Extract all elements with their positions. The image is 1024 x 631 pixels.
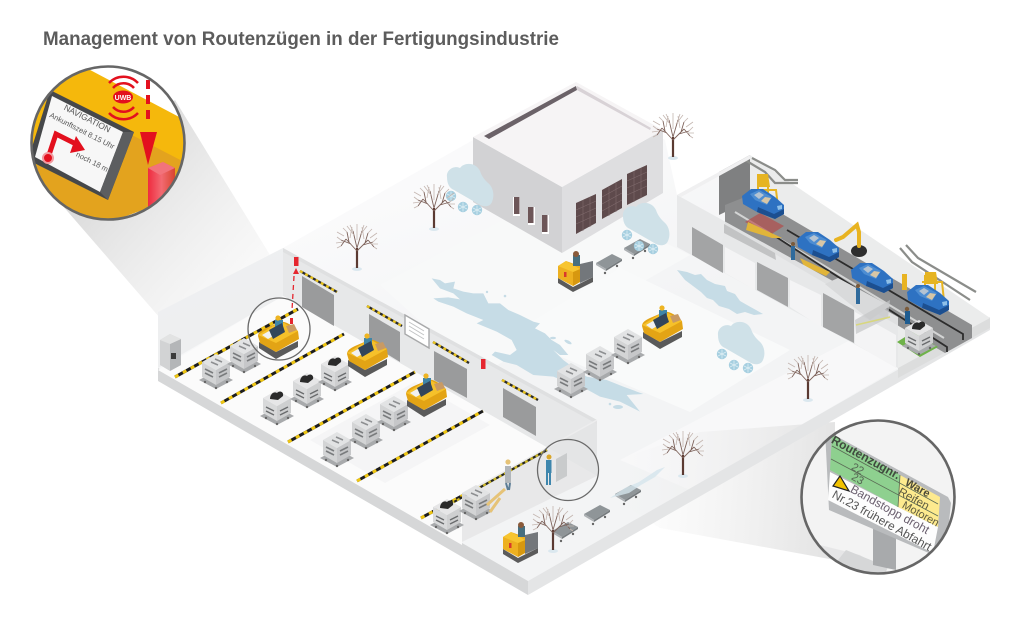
car body line	[742, 174, 949, 315]
UWB signal	[109, 77, 138, 119]
zoom circle: departure display: 23	[849, 471, 866, 488]
building: warehouse	[473, 82, 663, 253]
flatbed train with tug: top	[558, 239, 650, 292]
dock doors	[302, 276, 536, 436]
right hall: production line	[719, 155, 990, 378]
zoom circle: departure display: Ware	[903, 477, 932, 500]
cloud with snow: right	[717, 322, 764, 373]
zoom circle: departure display	[800, 420, 954, 590]
robot arm	[836, 225, 907, 290]
green mat with trolley	[897, 320, 938, 357]
screen white area	[828, 472, 938, 553]
darker lower body	[36, 136, 181, 218]
charging kiosk	[160, 334, 181, 371]
trolleys and tugs: lane 1	[199, 315, 299, 389]
red UWB markers	[292, 257, 486, 369]
information display on wall	[405, 315, 429, 348]
tablet with route guidance	[28, 90, 134, 200]
workers at the line	[791, 242, 910, 324]
bottom train with tug	[503, 485, 641, 563]
red guide beam	[140, 80, 175, 210]
trolleys and tugs: lane 2	[260, 333, 388, 425]
callout beam: navigation zoom	[62, 100, 300, 345]
tree near hall	[336, 224, 378, 271]
zoom circle: departure display: Reifen	[896, 486, 931, 513]
bezel	[825, 430, 951, 560]
tree front	[532, 506, 574, 553]
train on yard	[554, 305, 683, 398]
tablet with route guidance: noch 18 m	[74, 150, 110, 174]
tree behind building	[652, 113, 694, 160]
hall floor	[158, 296, 597, 545]
small ice patch	[610, 467, 665, 498]
hazard lane markings on floor	[175, 309, 547, 518]
warning triangle	[833, 476, 849, 491]
tree left of building	[413, 184, 455, 231]
tablet with route guidance: Ankunftszeit 8.15 Uhr	[48, 110, 117, 151]
zoom circle: departure display: Bandstopp droht	[848, 482, 932, 537]
tablet with route guidance: NAVIGATION	[62, 102, 112, 134]
receiving area goods and worker	[430, 453, 567, 534]
yellow table	[898, 475, 940, 527]
overhead rails	[745, 158, 976, 300]
cloud with snow: left of building	[446, 164, 493, 215]
small circle: display terminal	[538, 440, 598, 500]
ground plane	[158, 85, 990, 581]
yellow vehicle body	[32, 70, 184, 166]
zoom circle: departure display: Motoren	[900, 499, 941, 529]
puddle: main ice patch	[432, 278, 643, 412]
tree centre	[662, 431, 704, 478]
green table	[830, 435, 900, 507]
UWB signal: UWB	[115, 95, 131, 102]
stand	[873, 529, 896, 570]
tree right	[787, 355, 829, 402]
zoom circle: departure display: 22	[849, 461, 866, 478]
trolleys and tugs: lane 3	[320, 373, 447, 467]
hazard stripes above doors	[300, 271, 538, 400]
left hall: translucent back and side walls	[158, 248, 597, 476]
zoom circle: departure display: Routenzugnr.	[829, 433, 903, 482]
receiving area wall	[436, 420, 597, 542]
zoom circle: departure display: Nr.23 frühere Abfahrt	[830, 487, 935, 554]
zoom circle: navigation tablet	[30, 65, 186, 221]
title: Management von Routenzügen in der Fertigungsindustrie	[43, 29, 559, 50]
cloud with snow: above train	[622, 203, 669, 254]
callout beam: display zoom	[600, 422, 835, 560]
hall wall: production front	[677, 155, 898, 368]
floor slab edges	[158, 317, 990, 595]
puddle: ice patch right	[677, 270, 763, 315]
small circle: tug	[248, 298, 310, 360]
